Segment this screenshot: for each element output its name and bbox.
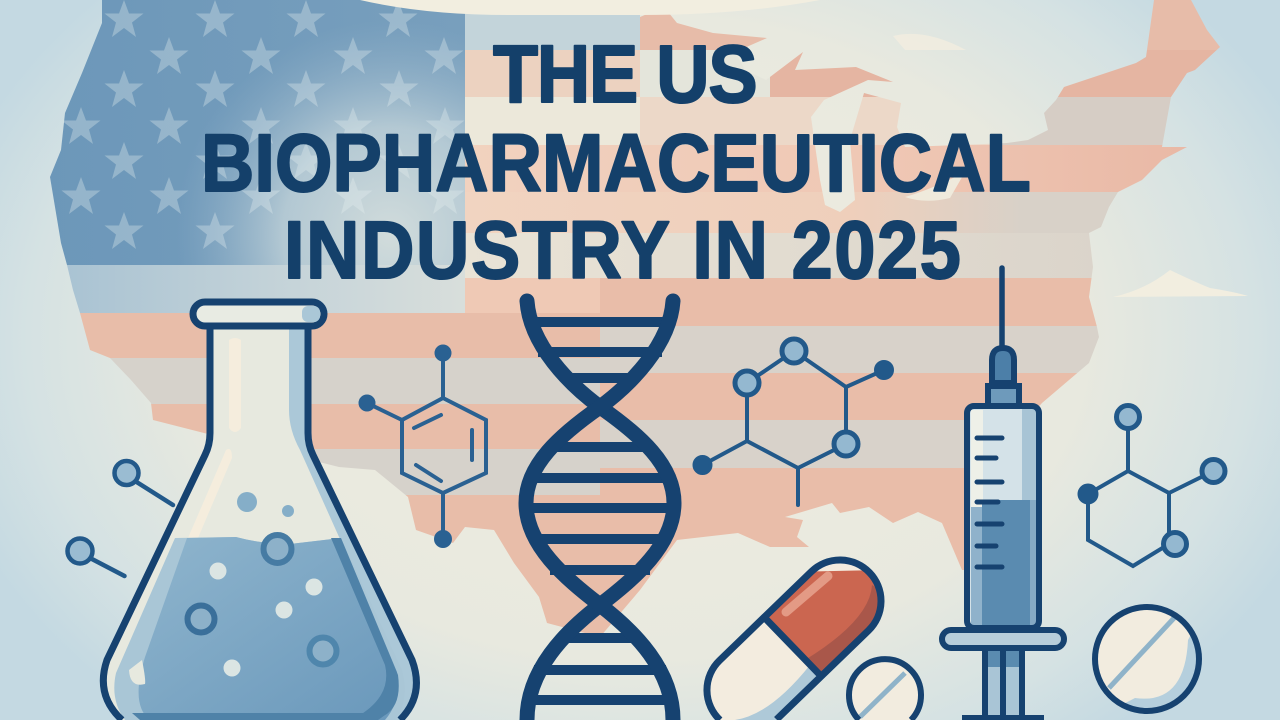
syringe barrel [968, 406, 1039, 628]
flask lip [193, 302, 324, 326]
clouds [360, 0, 1248, 297]
flag canton [40, 0, 465, 265]
flask bubbles [188, 492, 336, 676]
icon: conical flask [103, 302, 420, 720]
icon: benzene molecule [360, 346, 486, 546]
Lake Erie [906, 178, 962, 201]
icon: DNA double helix [526, 301, 674, 720]
icon: syringe [942, 268, 1064, 720]
title [201, 27, 1031, 296]
icon: left molecule fragments [68, 461, 173, 576]
flask glass shading [289, 328, 420, 720]
title: THE US [493, 27, 758, 120]
icon: capsule [707, 560, 881, 720]
syringe plunger [985, 651, 1022, 717]
icon: hexagon molecule centre [694, 339, 892, 505]
title: BIOPHARMACEUTICAL [201, 116, 1031, 209]
icon: round tablet [1095, 607, 1199, 711]
flag stripes, left part [80, 313, 600, 633]
flask liquid [114, 537, 405, 720]
icon: hexagon molecule right [1080, 406, 1225, 566]
flag stars [62, 0, 464, 249]
flag stripes, right part [600, 278, 1099, 633]
icon: small round pill [849, 659, 921, 720]
title: INDUSTRY IN 2025 [284, 203, 961, 296]
